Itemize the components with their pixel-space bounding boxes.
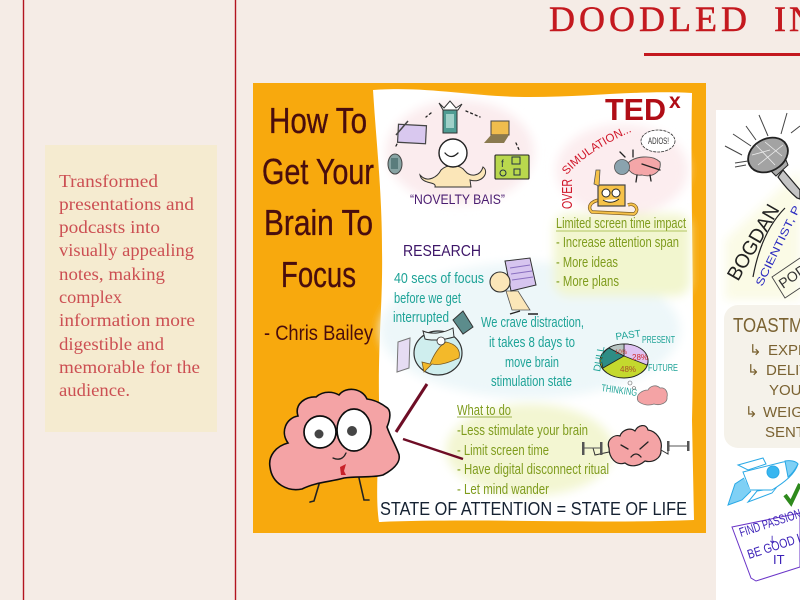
callout: find passion (732, 506, 800, 581)
panel: TEDx sketchnote (253, 83, 706, 533)
chart: attention pie: 48% (620, 365, 636, 374)
text block: what to do: - Let mind wander (457, 481, 549, 498)
panel: toastmasters: ↳ (749, 342, 762, 359)
illustration: over simulation (559, 128, 676, 216)
text block: limited screen time impact: - More plans (556, 273, 619, 290)
callout: find passion: IT (773, 552, 785, 567)
icon: brain lifting dumbbells (582, 426, 690, 466)
character: fleeing bug (614, 150, 660, 182)
heading: doodled in (549, 0, 800, 56)
text block: limited screen time impact: - More ideas (556, 254, 618, 271)
text block: what to do: - Have digital disconnect ritual (457, 461, 609, 478)
speech bubble: adios: ADIOS! (648, 136, 669, 146)
tablet (396, 121, 426, 144)
title: how to get your brain to focus: Get Your (262, 151, 374, 192)
name: Bogdan: BOGDAN (723, 201, 784, 284)
title: how to get your brain to focus: Brain To (264, 202, 373, 243)
text block: crave distraction: move brain (505, 354, 559, 371)
text block: description: podcasts into (59, 217, 160, 237)
icon: microphone (725, 113, 800, 199)
text block: description: Transformed (59, 171, 158, 191)
chart: attention pie: 10% (615, 350, 628, 356)
title: how to get your brain to focus (262, 100, 374, 295)
text block: limited screen time impact: - Increase attention span (556, 234, 679, 251)
heading: research: RESEARCH (403, 243, 481, 260)
panel: toastmasters: ↳ (745, 404, 758, 421)
text block: description: visually appealing (59, 240, 194, 260)
title: how to get your brain to focus: How To (269, 100, 367, 141)
text block: description: digestible and (59, 334, 164, 354)
social media panel (495, 155, 529, 179)
person (420, 139, 486, 187)
text block: description: memorable for the (59, 357, 200, 377)
text block: crave distraction: it takes 8 days to (489, 334, 575, 351)
smartwatch (388, 154, 402, 174)
text block: 40 secs of focus: 40 secs of focus (394, 270, 484, 287)
illustration: fish bowl (397, 311, 473, 375)
text: scientist: SCIENTIST, P (754, 204, 800, 288)
text block: 40 secs of focus: interrupted (393, 309, 449, 326)
chart: attention pie: PRESENT (642, 335, 675, 346)
heading: doodled in: DOODLED (549, 0, 747, 39)
text block: description: audience. (59, 380, 130, 400)
chart: attention pie (592, 329, 678, 399)
text block: description: information more (59, 310, 195, 330)
panel: Bogdan sketchnote (cropped) (716, 110, 800, 600)
text block: description: presentations and (59, 194, 194, 214)
text: state of attention: STATE OF ATTENTION = STATE OF LIFE (380, 499, 687, 519)
icon: phone (453, 311, 473, 334)
icon: small thinking brain (628, 381, 667, 405)
social media panel: f (501, 159, 504, 170)
text block: crave distraction: We crave distraction, (481, 314, 584, 331)
text block: description: complex (59, 287, 122, 307)
author: - Chris Bailey (264, 322, 373, 345)
text block: limited screen time impact (556, 215, 687, 290)
label: podcast box (772, 258, 800, 298)
panel: toastmasters: ↳ (747, 362, 760, 379)
character: square monster (590, 170, 637, 214)
text block: 40 secs of focus: before we get (394, 290, 462, 307)
chart: attention pie: THINKING (601, 383, 638, 399)
icon: pink brain mascot (270, 389, 399, 502)
chart: attention pie: 28% (632, 353, 648, 362)
arrows: brain pointers (396, 384, 463, 459)
callout: find passion: ↓ (768, 535, 776, 546)
text block: limited screen time impact: Limited screen time impact (556, 215, 687, 232)
chart: attention pie: FUTURE (648, 363, 678, 374)
chart: attention pie: DULL (592, 345, 607, 373)
logo: TEDx: TED (605, 92, 666, 127)
text block: description: notes, making (59, 264, 165, 284)
text block: crave distraction: stimulation state (491, 373, 572, 390)
illustration: person holding paper (490, 258, 538, 314)
caption: novelty bias: “NOVELTY BAIS” (410, 191, 505, 207)
icon: tablet (397, 338, 410, 372)
chart: attention pie: PAST (615, 329, 642, 343)
phone with crown (439, 101, 462, 133)
text block: 40 secs of focus (393, 270, 484, 326)
logo: TEDx: x (669, 90, 681, 113)
text block: what to do: - Limit screen time (457, 442, 549, 459)
icon: green check (785, 484, 800, 503)
icon: novelty bias person with devices (388, 101, 529, 187)
illustration: over simulation: OVER (559, 179, 576, 209)
text block: what to do: What to do (457, 402, 511, 419)
icon: rocket (728, 458, 798, 505)
illustration: over simulation: SIMULATION... (562, 128, 631, 174)
text block: crave distraction (481, 314, 584, 390)
text block: what to do: -Less stimulate your brain (457, 422, 588, 439)
laptop (484, 121, 509, 143)
text block: description (59, 171, 200, 400)
tint blobs (380, 100, 690, 496)
panel: description callout (45, 145, 217, 432)
panel: toastmasters (724, 305, 800, 448)
text block: what to do (457, 402, 609, 498)
title: how to get your brain to focus: Focus (281, 254, 356, 295)
